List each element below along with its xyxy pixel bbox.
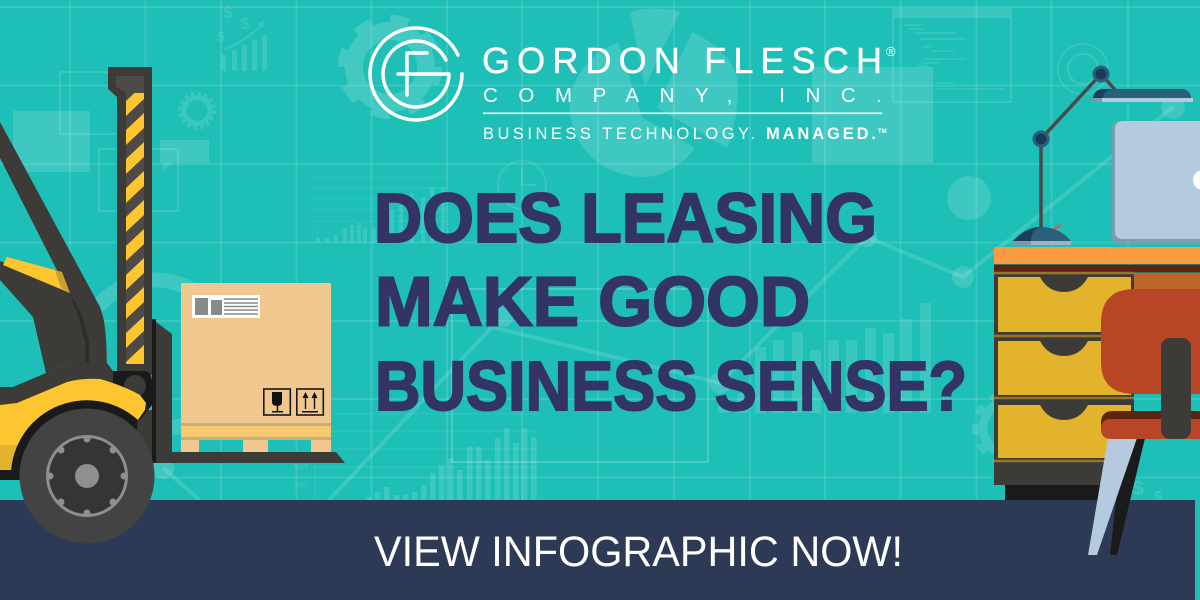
dollar signs by chair: $ [1132,478,1144,500]
lower chart gridlines and axis labels [294,414,537,500]
fork [172,452,345,463]
headline line 3: BUSINESS SENSE? [375,347,967,425]
axis labels: 0.03 [294,464,308,471]
tyre [20,408,154,544]
growth bar chart with dollars: $ [217,28,225,44]
chair seat [1101,419,1200,439]
front wheel [20,408,154,544]
bars [316,187,445,243]
lamp indicator [1053,225,1061,230]
footer banner [0,500,1195,600]
lamp joint upper [1094,67,1108,81]
drawer face [998,341,1131,395]
body shadow [0,445,20,470]
lift carriage [135,319,172,463]
lamp shade front [1103,89,1191,98]
translucent panel [812,67,933,163]
illustration: cardboard box on pallet [181,283,331,452]
shipping label [192,295,260,318]
company suffix: COMPANY, INC. [483,84,882,107]
icon: this way up arrows [297,389,323,415]
illustration: chair [1088,289,1200,555]
headline line 2: MAKE GOOD [375,262,810,340]
drawer face [998,277,1131,332]
lamp shade rim shadow [1092,98,1103,102]
arrows [302,392,318,412]
concentric circle icon [1058,44,1108,94]
illustration: laptop [1112,121,1200,244]
hub [75,464,99,488]
axis labels [294,464,308,489]
illustration: desk [994,247,1200,500]
clock outline [498,161,546,209]
left panel shapes [13,111,209,172]
forklift yellow seat trim [3,257,70,293]
large gear behind logo [343,20,437,114]
lamp arms [1041,74,1117,228]
lamp base plate light [1031,241,1071,245]
illustration: forklift [0,67,345,544]
icon frame [264,389,290,415]
drawer middle [998,341,1131,395]
pallet deck [181,426,331,437]
illustration: desk lamp [1013,67,1193,245]
chair brace [1161,338,1191,439]
wheel arch [11,400,138,480]
thin outline frame [452,289,708,462]
window outline [892,8,1012,103]
pallet lower shadow [181,437,331,440]
tagline bold: MANAGED. [766,125,876,143]
pallet top shadow [181,423,331,426]
forklift mast [108,67,152,375]
label text lines [224,299,258,314]
lower centre bar chart [366,428,536,500]
hinge bolt [124,375,146,397]
desk back panel [1134,273,1200,303]
upper centre bar chart [312,177,450,243]
code window [812,8,1012,163]
label paper [192,295,260,318]
gridlines [312,177,450,243]
icon frame [297,389,323,415]
chair backrest [1101,289,1200,394]
headline line 1: DOES LEASING [374,179,877,257]
carriage shadow [152,319,156,463]
line graph [163,107,1173,500]
mast hazard stripes [126,84,144,370]
ring behind forklift [80,280,230,430]
code lines [904,25,1004,89]
forklift cab back [0,261,89,373]
rim studs [46,436,128,516]
registered mark: ® [886,44,896,59]
drawer handle [1040,341,1088,356]
laptop edge [1112,121,1200,244]
line graph nodes [152,95,1185,479]
glass [272,392,283,412]
pallet legs [181,440,331,452]
icon: fragile glass [264,389,290,415]
dollar signs by chair: $ [1154,488,1163,505]
boom inner shadow [70,293,89,363]
drawer top [998,277,1131,332]
drawer bottom [998,405,1131,458]
laptop lid [1115,121,1200,239]
forklift yellow body [0,379,146,480]
tagline: BUSINESS TECHNOLOGY. [483,125,755,143]
growth bar chart with dollars [217,3,267,71]
desk foot [1005,485,1105,500]
axis labels: 0.02 [294,482,308,489]
lamp shade rim [1102,98,1193,102]
mast inner channel [116,76,144,364]
logo mark: GF rings [370,28,462,120]
company name: GORDON FLESCH [482,40,882,81]
company logo [370,28,896,143]
outline frames [60,72,178,211]
right bar chart [718,303,931,413]
circle accent [947,176,991,220]
gridlines [312,414,537,500]
chair front leg [1088,438,1137,555]
drawer cabinet [994,272,1134,485]
small gear [180,94,214,128]
cab base [0,363,113,410]
lamp base plate [1013,241,1031,245]
logo divider [483,112,882,114]
label blocks [195,298,222,315]
headline [374,179,967,425]
growth bar chart with dollars: $ [223,3,233,22]
gear beside desk [976,394,1044,462]
gauge wedges [570,8,738,177]
undercarriage [0,470,30,480]
trademark: TM [878,129,887,135]
lamp base left [1013,227,1041,241]
box body [181,283,331,423]
lamp joint lower [1034,132,1048,146]
seat trim shadow [55,270,70,293]
lamp shade back [1093,89,1115,98]
rim [48,436,126,516]
desk edge [994,264,1200,272]
drawer face [998,405,1131,458]
dollar signs by chair [1132,478,1163,505]
desk top [994,247,1200,264]
hinge housing [113,371,152,420]
forklift boom arm [0,122,107,375]
drawer handle [1040,277,1088,292]
call to action: VIEW INFOGRAPHIC NOW! [374,528,903,576]
drawer handle [1040,405,1088,420]
laptop logo [1193,170,1200,190]
drawer trim lines [994,273,1134,461]
lamp base right [1031,227,1071,241]
chair back leg [1110,438,1145,555]
chair seat under [1101,411,1200,430]
growth bar chart with dollars: $ [240,14,250,33]
